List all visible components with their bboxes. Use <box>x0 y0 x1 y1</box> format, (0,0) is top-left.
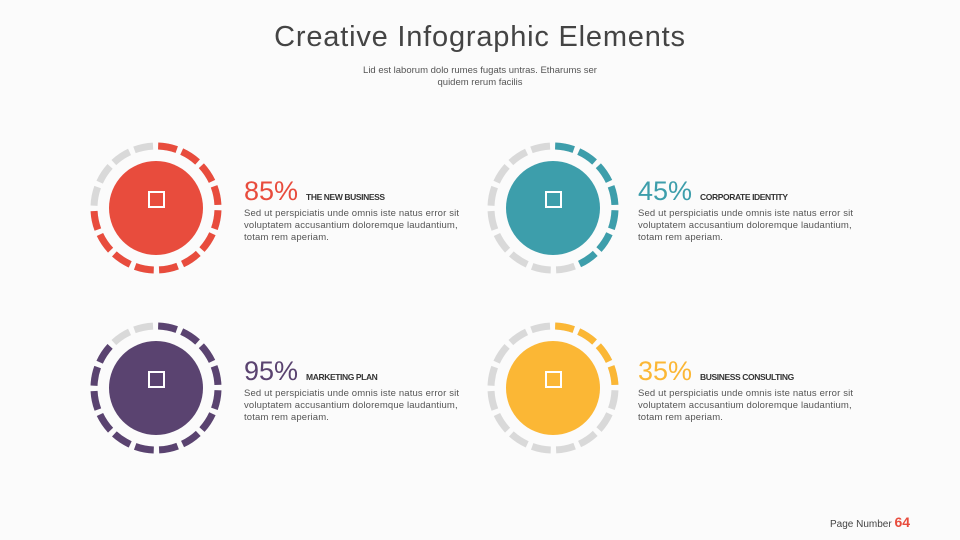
text: Sed ut perspiciatis unde omnis iste natus error sit voluptatem accusantium doloremque laudantium, totam rem aperiam. <box>244 208 459 243</box>
subtitle: Lid est laborum dolo rumes fugats untras. Etharums ser quidem rerum facilis <box>363 65 597 88</box>
panel: 85% new business <box>90 142 459 274</box>
ring teal <box>488 142 618 274</box>
page number: Page Number 64 <box>830 514 910 530</box>
ring yellow <box>488 322 618 454</box>
heading: 95% MARKETING PLAN <box>244 356 377 386</box>
panel: 45% corporate identity <box>488 142 853 274</box>
text: Sed ut perspiciatis unde omnis iste natus error sit voluptatem accusantium doloremque laudantium, totam rem aperiam. <box>244 388 459 423</box>
heading: 35% BUSINESS CONSULTING <box>638 356 794 386</box>
heading: 45% CORPORATE IDENTITY <box>638 176 788 206</box>
panel: 95% marketing plan <box>90 322 459 454</box>
title: Creative Infographic Elements <box>274 21 686 53</box>
text: Sed ut perspiciatis unde omnis iste natus error sit voluptatem accusantium doloremque laudantium, totam rem aperiam. <box>638 388 853 423</box>
panel: 35% business consulting <box>488 322 853 454</box>
text: Sed ut perspiciatis unde omnis iste natus error sit voluptatem accusantium doloremque laudantium, totam rem aperiam. <box>638 208 853 243</box>
ring purple <box>90 322 222 454</box>
ring red <box>90 142 222 274</box>
heading: 85% THE NEW BUSINESS <box>244 176 385 206</box>
